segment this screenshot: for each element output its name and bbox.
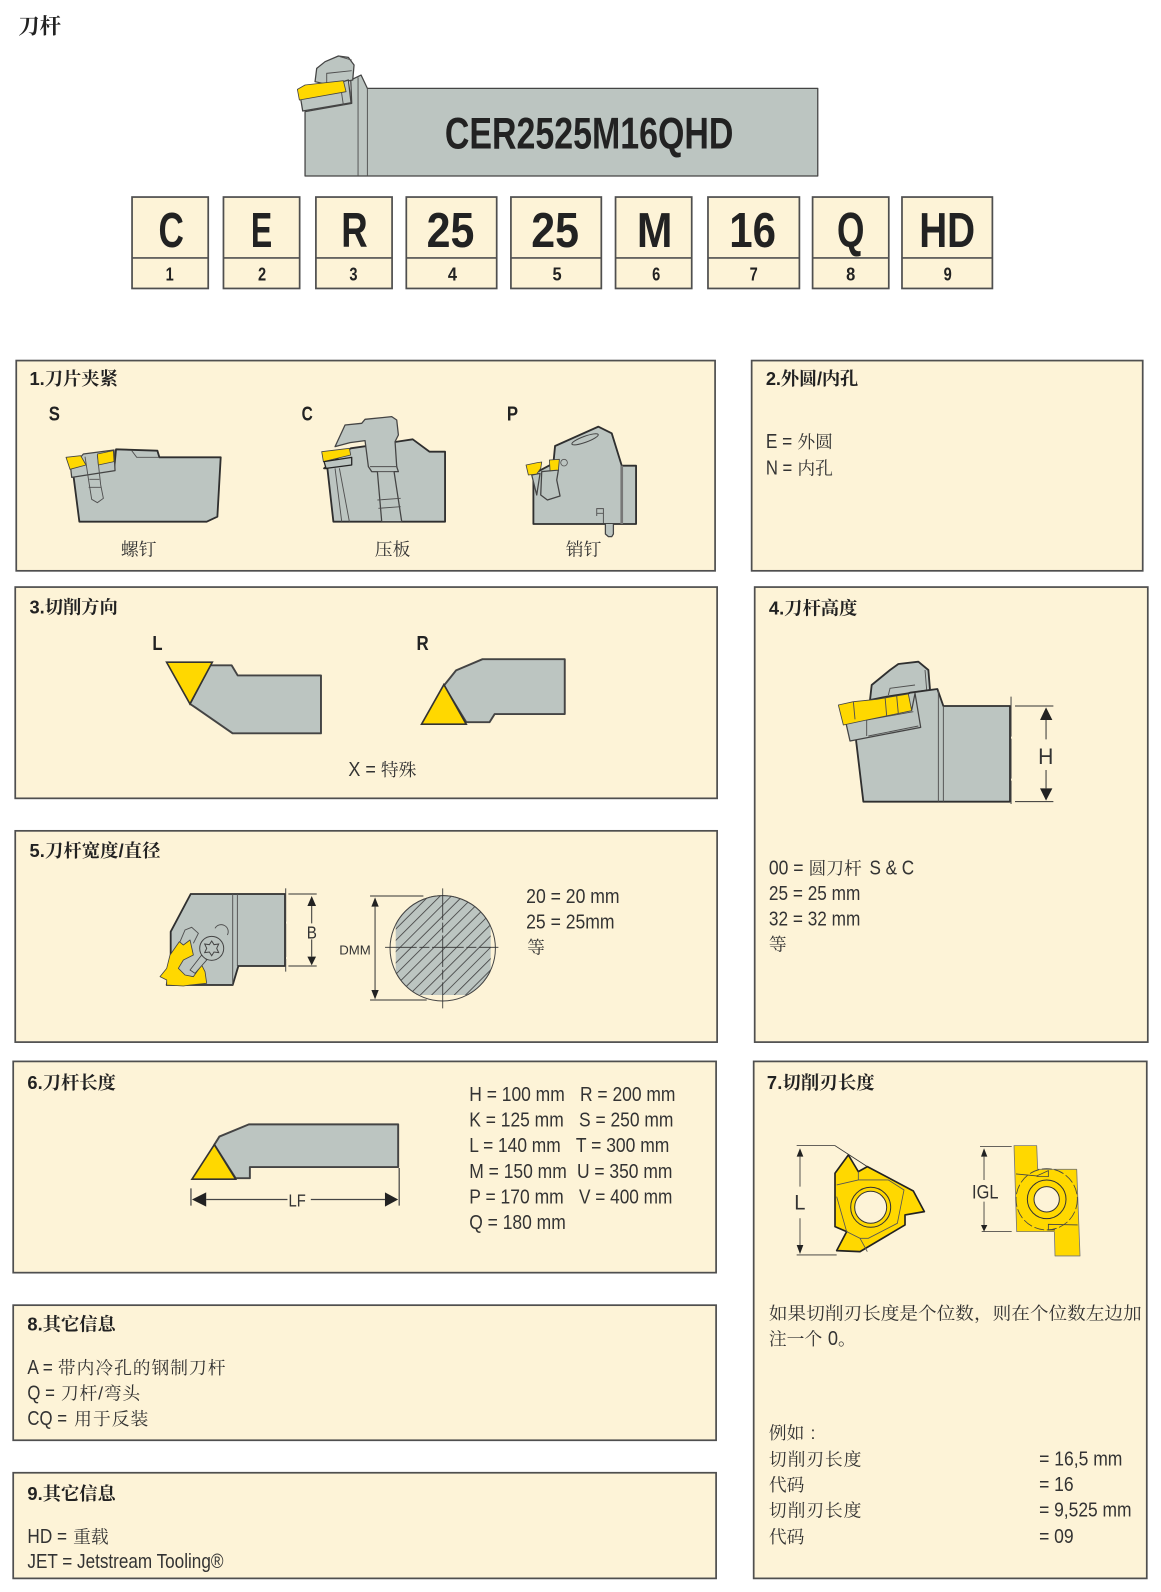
- clamp labels: 销钉: [566, 540, 602, 560]
- height codes: 32 = 32 mm: [769, 908, 860, 930]
- note: X =: [348, 759, 376, 781]
- height codes: 00 =: [769, 858, 803, 880]
- box 8: 8: [846, 263, 855, 284]
- box 7: 16: [729, 204, 776, 258]
- clamp labels: 压板: [375, 540, 411, 560]
- icon: holder body: [297, 56, 818, 176]
- options: JET = Jetstream Tooling®: [27, 1551, 223, 1573]
- panel: 5 shank width / diameter: [15, 831, 717, 1042]
- box 2: [223, 197, 300, 288]
- box 1: [132, 197, 208, 288]
- length codes: Q = 180 mm: [469, 1212, 566, 1234]
- length codes: S = 250 mm: [579, 1109, 673, 1131]
- heading: 6.刀杆长度: [27, 1072, 116, 1093]
- panel: 1 insert clamping: [16, 361, 715, 571]
- dimension B: B: [307, 923, 317, 943]
- icon: round shank with diameter dimension: [370, 888, 498, 1008]
- length codes: L = 140 mm: [469, 1135, 561, 1157]
- icon: tool with LF dimension: [191, 1124, 399, 1207]
- note: 注一个: [769, 1329, 822, 1349]
- options: [27, 1526, 223, 1573]
- box 9: [902, 197, 992, 288]
- note: 如果切削刃长度是个位数，则在个位数左边加: [769, 1303, 1142, 1323]
- heading: 4.刀杆高度: [769, 597, 857, 618]
- height codes: 等: [769, 935, 787, 955]
- box 5: 5: [553, 263, 562, 284]
- options: 带内冷孔的钢制刀杆: [58, 1358, 226, 1378]
- panel: 8 other information: [13, 1305, 716, 1440]
- options: [27, 1357, 226, 1430]
- label R: R: [416, 633, 429, 655]
- title: 刀杆: [18, 15, 62, 39]
- length codes: U = 350 mm: [577, 1161, 672, 1183]
- dimension H: H: [1038, 744, 1053, 769]
- width codes: 20 = 20 mm: [526, 886, 620, 908]
- box 8: Q: [837, 204, 864, 258]
- note: [348, 759, 417, 781]
- length codes: V = 400 mm: [579, 1187, 672, 1209]
- note: [769, 1303, 1142, 1350]
- options: A =: [27, 1357, 53, 1379]
- code position boxes: [132, 197, 992, 288]
- height codes: S & C: [869, 858, 914, 880]
- options: HD =: [27, 1526, 67, 1548]
- width codes: [526, 886, 620, 958]
- height codes: [769, 858, 914, 955]
- box 7: [708, 197, 799, 288]
- heading: 7.切削刃长度: [767, 1072, 875, 1093]
- length codes: T = 300 mm: [576, 1135, 669, 1157]
- example table: 切削刃长度: [769, 1450, 862, 1470]
- box 2: E: [251, 204, 272, 258]
- example table: [769, 1423, 1132, 1548]
- dimension LF: LF: [288, 1191, 306, 1211]
- options: [766, 431, 833, 479]
- box 9: 9: [944, 263, 952, 284]
- heading: 2.外圆/内孔: [766, 368, 858, 389]
- width codes: 等: [527, 938, 545, 958]
- panel: 4 shank height: [755, 587, 1148, 1042]
- box 6: [616, 197, 692, 288]
- heading: 8.其它信息: [27, 1314, 118, 1335]
- length codes: P = 170 mm: [469, 1187, 564, 1209]
- options: 刀杆/弯头: [61, 1384, 140, 1404]
- height codes: 25 = 25 mm: [769, 883, 860, 905]
- example table: 切削刃长度: [769, 1500, 862, 1520]
- box 1: C: [158, 204, 184, 258]
- tool holder illustration: [297, 56, 818, 176]
- icon: right-hand tool: [422, 659, 565, 724]
- dimension L: L: [794, 1191, 806, 1215]
- box 9: HD: [919, 204, 975, 258]
- box 5: [511, 197, 601, 288]
- clamp type letters: [49, 403, 518, 425]
- panel: 3 cutting direction: [15, 587, 717, 798]
- icon: holder with height dimension: [838, 662, 1053, 804]
- icon: holder with width dimension: [160, 888, 317, 986]
- note: 0: [828, 1328, 838, 1350]
- box 1: 1: [166, 263, 174, 284]
- clamp type letters: C: [302, 403, 313, 425]
- icon: left-hand tool: [167, 662, 321, 733]
- model code: CER2525M16QHD: [445, 109, 733, 158]
- box 3: R: [341, 204, 368, 258]
- options: N =: [766, 457, 792, 479]
- width codes: 25 = 25mm: [526, 911, 615, 933]
- clamp labels: 螺钉: [121, 540, 157, 560]
- clamp labels: [121, 540, 602, 560]
- example table: = 9,525 mm: [1039, 1499, 1132, 1521]
- heading: 5.刀杆宽度/直径: [29, 840, 161, 861]
- box 5: 25: [531, 204, 579, 258]
- box 3: [316, 197, 392, 288]
- heading: 9.其它信息: [27, 1483, 118, 1504]
- clamp type letters: P: [507, 403, 518, 425]
- box 7: 7: [750, 263, 758, 284]
- heading: 3.切削方向: [29, 596, 118, 617]
- example table: = 16: [1039, 1474, 1074, 1496]
- clamp type letters: S: [49, 403, 60, 425]
- heading: 1.刀片夹紧: [29, 368, 119, 389]
- options: 重载: [73, 1527, 109, 1547]
- note: 特殊: [381, 760, 417, 780]
- note: 。: [838, 1329, 856, 1349]
- options: 用于反装: [74, 1409, 149, 1429]
- options: 外圆: [797, 432, 833, 452]
- options: 内孔: [797, 458, 833, 478]
- length codes: [469, 1084, 675, 1234]
- icon: triangular insert with L dimension: [797, 1146, 924, 1255]
- box 6: M: [637, 204, 672, 258]
- options: CQ =: [27, 1408, 67, 1430]
- length codes: M = 150 mm: [469, 1161, 567, 1183]
- panel: 9 other information: [13, 1473, 716, 1578]
- box 6: 6: [652, 263, 660, 284]
- icon: laydown insert with IGL dimension: [980, 1146, 1080, 1256]
- options: Q =: [27, 1383, 55, 1405]
- label L: L: [152, 633, 163, 655]
- box 4: 25: [427, 204, 474, 258]
- dimension IGL: IGL: [972, 1183, 999, 1204]
- example table: = 09: [1039, 1526, 1074, 1548]
- example table: = 16,5 mm: [1039, 1449, 1122, 1471]
- length codes: K = 125 mm: [469, 1109, 564, 1131]
- box 4: [406, 197, 497, 288]
- height codes: 圆刀杆: [809, 859, 862, 879]
- dimension DMM: DMM: [339, 943, 371, 958]
- icon: screw clamp S and plate clamp C: [66, 417, 445, 522]
- panel: 6 holder length: [13, 1061, 716, 1273]
- panel: 2 external / internal: [752, 361, 1143, 571]
- box 2: 2: [258, 263, 266, 284]
- options: E =: [766, 431, 792, 453]
- box 4: 4: [448, 263, 458, 284]
- example table: :: [811, 1423, 816, 1443]
- box 8: [813, 197, 889, 288]
- box 3: 3: [349, 263, 358, 284]
- example table: 代码: [769, 1475, 805, 1495]
- length codes: H = 100 mm: [469, 1084, 565, 1106]
- length codes: R = 200 mm: [580, 1084, 675, 1106]
- example table: 例如: [769, 1423, 804, 1443]
- icon: pin clamp P: [526, 427, 636, 537]
- panel: 7 cutting edge length: [754, 1061, 1147, 1578]
- example table: 代码: [769, 1527, 805, 1547]
